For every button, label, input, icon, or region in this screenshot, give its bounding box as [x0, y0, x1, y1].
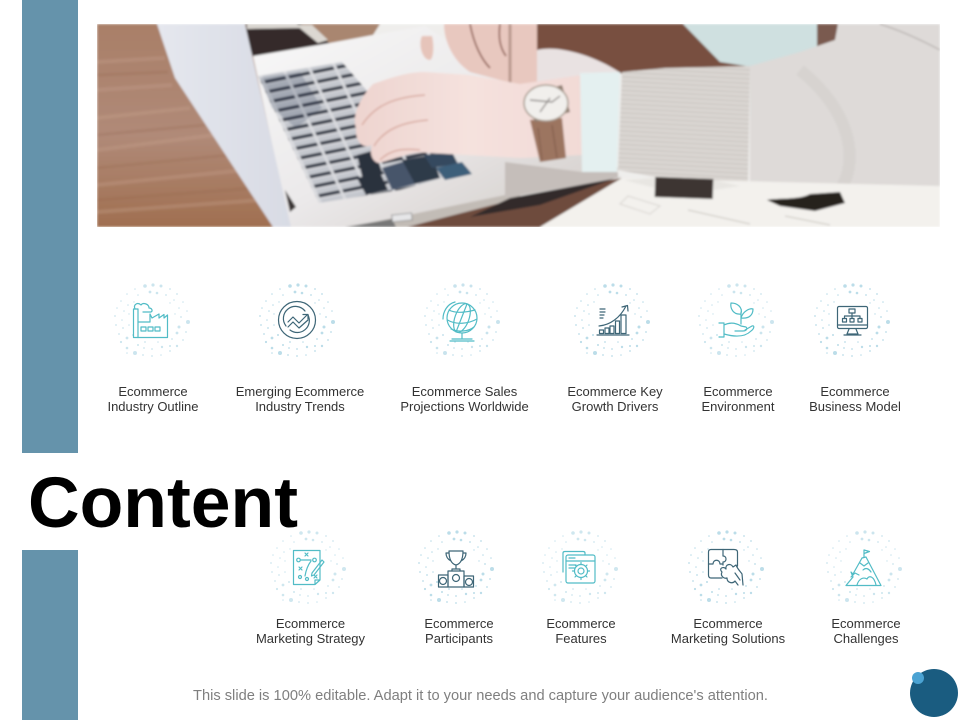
- icon row 2 item: Ecommerce Marketing Strategy: Marketing Strategy: [256, 631, 366, 646]
- label: Ecommerce Key: [567, 384, 663, 399]
- icon row 1 item: Ecommerce Environment: [698, 283, 775, 414]
- icon row 2 item: Ecommerce Marketing Solutions: Marketing Solutions: [671, 631, 786, 646]
- icon: strategy sheet: [294, 550, 324, 584]
- icon: factory: [134, 304, 168, 338]
- icon: puzzle with hand: [708, 550, 743, 585]
- photo: hands typing on a laptop: [97, 24, 940, 227]
- icon: growth chart: [597, 306, 629, 335]
- icon: globe: [443, 302, 477, 341]
- title: Content: [28, 463, 298, 543]
- dotted ring: [814, 283, 890, 357]
- icon row 2 item: Ecommerce Challenges: [826, 530, 902, 646]
- icon: hand with plant: [719, 303, 754, 337]
- sidebar bar: lower: [22, 550, 78, 720]
- dotted ring: [418, 530, 494, 604]
- icon row 1 item: Ecommerce Industry Outline: Industry Outline: [107, 399, 199, 414]
- dotted ring: [424, 283, 500, 357]
- icon row 1 item: Ecommerce Sales Projections Worldwide: Projections Worldwide: [400, 399, 529, 414]
- icon row 1 item: Emerging Ecommerce Industry Trends: [236, 283, 364, 414]
- label: Emerging Ecommerce: [236, 384, 364, 399]
- icon: trophy on podium: [438, 551, 474, 587]
- icon: trend circle: [278, 302, 316, 338]
- icon row 1 item: Ecommerce Key Growth Drivers: [567, 283, 663, 414]
- dotted ring: [270, 530, 346, 604]
- label: Ecommerce: [820, 384, 890, 399]
- icon row 1 item: Ecommerce Key Growth Drivers: Growth Drivers: [572, 399, 659, 414]
- label: Ecommerce: [703, 384, 773, 399]
- icon row 2 item: Ecommerce Participants: Participants: [425, 631, 493, 646]
- label: Ecommerce Sales: [412, 384, 518, 399]
- label: Ecommerce: [831, 616, 901, 631]
- icon row 1 item: Emerging Ecommerce Industry Trends: Industry Trends: [255, 399, 345, 414]
- dotted ring: [826, 530, 902, 604]
- icon row 2 item: Ecommerce Marketing Solutions: [671, 530, 786, 646]
- label: Ecommerce: [424, 616, 494, 631]
- icon row 1 item: Ecommerce Industry Outline: [107, 283, 199, 414]
- icon row 2 item: Ecommerce Features: Features: [555, 631, 607, 646]
- dotted ring: [114, 283, 190, 357]
- label: Ecommerce: [693, 616, 763, 631]
- icon row 2 item: Ecommerce Challenges: Challenges: [833, 631, 899, 646]
- dotted ring: [259, 283, 335, 357]
- sidebar bar: upper: [22, 0, 78, 453]
- icon row 1 item: Ecommerce Sales Projections Worldwide: [400, 283, 529, 414]
- dotted ring: [698, 283, 774, 357]
- icon row 1 item: Ecommerce Business Model: [809, 283, 901, 414]
- decorative corner circle: [910, 669, 958, 717]
- icon row 2 item: Ecommerce Features: [542, 530, 618, 646]
- label: Ecommerce: [546, 616, 616, 631]
- icon: windows with gear: [563, 552, 595, 583]
- label: Ecommerce: [118, 384, 188, 399]
- icon row 1 item: Ecommerce Business Model: Business Model: [809, 399, 901, 414]
- label: Ecommerce: [276, 616, 345, 631]
- icon row 1 item: Ecommerce Environment: Environment: [702, 399, 775, 414]
- footer text: This slide is 100% editable. Adapt it to your needs and capture your audience's attention.: [193, 688, 768, 704]
- dotted ring: [574, 283, 650, 357]
- icon: mountain with flag: [846, 550, 881, 586]
- dotted ring: [542, 530, 618, 604]
- icon row 2 item: Ecommerce Participants: [418, 530, 494, 646]
- icon row 2 item: Ecommerce Marketing Strategy: [256, 530, 366, 646]
- dotted ring: [688, 530, 764, 604]
- icon: monitor with org chart: [838, 306, 868, 335]
